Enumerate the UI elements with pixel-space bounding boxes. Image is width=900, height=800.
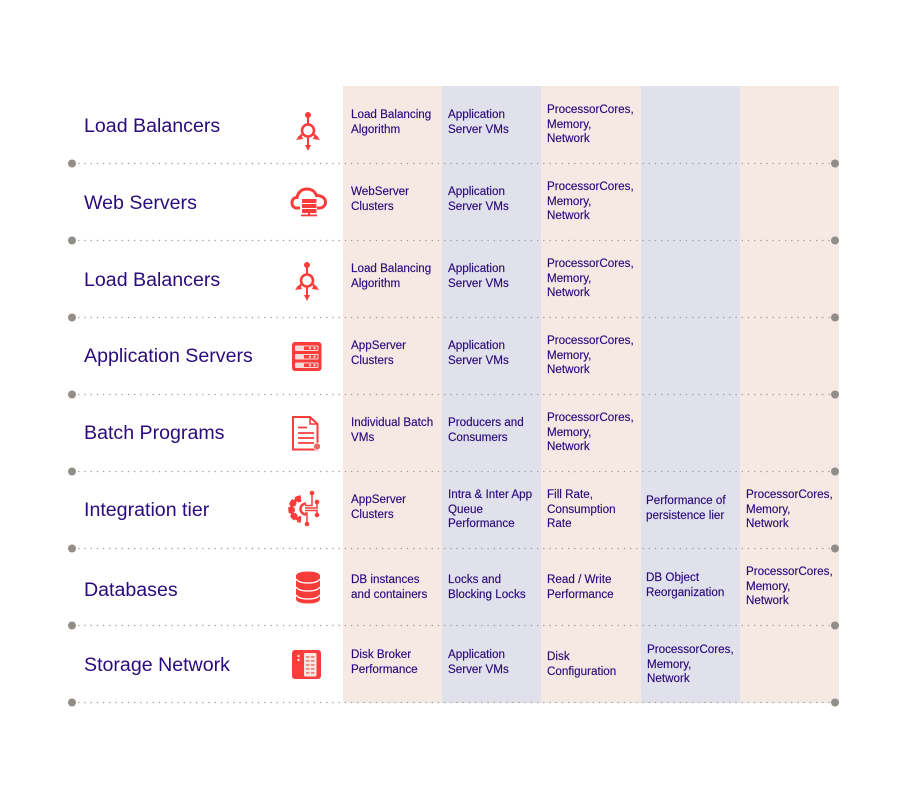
cell texts: row 2 bbox=[351, 180, 634, 222]
icon: server rack bbox=[292, 342, 322, 371]
cell texts: row 2: Server VMs bbox=[448, 200, 509, 213]
cell texts: row 6: ProcessorCores, bbox=[746, 488, 833, 501]
cell texts: row 8: Configuration bbox=[547, 665, 616, 678]
cell texts: row 8 bbox=[351, 643, 734, 685]
cell texts: row 3: Load Balancing bbox=[351, 262, 431, 275]
cell texts: row 6: AppServer bbox=[351, 493, 406, 506]
cell texts: row 1: Application bbox=[448, 108, 505, 121]
cell texts: row 1: Network bbox=[547, 132, 590, 145]
cell texts: row 2: ProcessorCores, bbox=[547, 180, 634, 193]
cell texts: row 6: Rate bbox=[547, 517, 572, 530]
cell texts: row 4: Server VMs bbox=[448, 354, 509, 367]
cell texts: row 6: Network bbox=[746, 517, 789, 530]
cell texts: row 7: DB Object bbox=[646, 571, 699, 584]
cell texts: row 3: ProcessorCores, bbox=[547, 257, 634, 270]
cell texts: row 3 bbox=[351, 257, 634, 299]
cell texts: row 5: Network bbox=[547, 440, 590, 453]
cell texts: row 3: Application bbox=[448, 262, 505, 275]
cell texts: row 1 bbox=[351, 103, 634, 145]
cell texts: row 2: Clusters bbox=[351, 200, 394, 213]
cell texts: row 2: WebServer bbox=[351, 185, 409, 198]
cell texts: row 5: Memory, bbox=[547, 426, 591, 439]
cell texts: row 8: Disk bbox=[547, 650, 570, 663]
cell texts: row 6: Intra & Inter App bbox=[448, 488, 532, 501]
cell texts: row 1: Server VMs bbox=[448, 123, 509, 136]
cell texts: row 6 bbox=[351, 488, 833, 530]
cell texts: row 4: ProcessorCores, bbox=[547, 334, 634, 347]
cell texts: row 6: Fill Rate, bbox=[547, 488, 593, 501]
cell texts: row 3: Algorithm bbox=[351, 277, 400, 290]
panel: column backgrounds bbox=[343, 86, 839, 703]
row heading: Batch Programs: Batch Programs bbox=[84, 422, 224, 444]
icon: load balancer bbox=[295, 262, 319, 301]
cell texts: row 4: AppServer bbox=[351, 339, 406, 352]
row heading: Integration tier: Integration tier bbox=[84, 499, 209, 521]
cell texts: row 8: Performance bbox=[351, 663, 418, 676]
cell texts: row 8: ProcessorCores, bbox=[647, 643, 734, 656]
cell texts: row 8: Disk Broker bbox=[351, 648, 411, 661]
row heading: Load Balancers: Load Balancers bbox=[84, 269, 220, 291]
icon: load balancer bbox=[296, 112, 320, 151]
cell texts: row 8: Memory, bbox=[647, 658, 691, 671]
cell texts: row 7: Memory, bbox=[746, 580, 790, 593]
cell texts: row 4: Memory, bbox=[547, 349, 591, 362]
row heading: Application Servers: Application Servers bbox=[84, 345, 253, 367]
cell texts: row 3: Memory, bbox=[547, 272, 591, 285]
cell texts: row 6: Performance bbox=[448, 517, 515, 530]
cell texts: row 5: Producers and bbox=[448, 416, 524, 429]
cell texts: row 4: Network bbox=[547, 363, 590, 376]
cell texts: row 7 bbox=[351, 565, 833, 607]
icon: cloud server bbox=[290, 188, 327, 216]
cell texts: row 4: Application bbox=[448, 339, 505, 352]
cell texts: row 3: Network bbox=[547, 286, 590, 299]
cell texts: row 6: Performance of bbox=[646, 494, 726, 507]
cell texts: row 3: Server VMs bbox=[448, 277, 509, 290]
cell texts: row 4 bbox=[351, 334, 634, 376]
cell texts: row 5: ProcessorCores, bbox=[547, 411, 634, 424]
cell texts: row 2: Memory, bbox=[547, 195, 591, 208]
row heading: Databases: Databases bbox=[84, 579, 178, 601]
cell texts: row 1: Memory, bbox=[547, 118, 591, 131]
cell texts: row 5: VMs bbox=[351, 431, 374, 444]
icon: database bbox=[296, 572, 320, 604]
cell texts: row 2: Application bbox=[448, 185, 505, 198]
cell texts: row 1: ProcessorCores, bbox=[547, 103, 634, 116]
cell texts: row 8: Application bbox=[448, 648, 505, 661]
cell texts: row 5: Individual Batch bbox=[351, 416, 433, 429]
row heading: Storage Network: Storage Network bbox=[84, 654, 230, 676]
icon: gear circuit bbox=[288, 490, 320, 526]
cell texts: row 1: Load Balancing bbox=[351, 108, 431, 121]
cell texts: row 7: Blocking Locks bbox=[448, 588, 526, 601]
cell texts: row 6: Clusters bbox=[351, 508, 394, 521]
cell texts: row 7: DB instances bbox=[351, 573, 420, 586]
cell texts: row 8: Network bbox=[647, 672, 690, 685]
icon: document bbox=[292, 416, 320, 450]
row heading: Load Balancers: Load Balancers bbox=[84, 115, 220, 137]
icon: storage unit bbox=[292, 650, 321, 679]
cell texts: row 1: Algorithm bbox=[351, 123, 400, 136]
cell texts: row 7: Read / Write bbox=[547, 573, 611, 586]
cell texts: row 7: ProcessorCores, bbox=[746, 565, 833, 578]
cell texts: row 6: persistence lier bbox=[646, 509, 724, 522]
cell texts: row 2: Network bbox=[547, 209, 590, 222]
cell texts: row 6: Queue bbox=[448, 503, 483, 516]
cell texts: row 7: and containers bbox=[351, 588, 427, 601]
cell texts: row 8: Server VMs bbox=[448, 663, 509, 676]
cell texts: row 6: Consumption bbox=[547, 503, 616, 516]
cell texts: row 7: Network bbox=[746, 594, 789, 607]
row heading: Web Servers: Web Servers bbox=[84, 192, 197, 214]
cell texts: row 5 bbox=[351, 411, 634, 453]
cell texts: row 7: Locks and bbox=[448, 573, 501, 586]
cell texts: row 7: Reorganization bbox=[646, 586, 724, 599]
cell texts: row 5: Consumers bbox=[448, 431, 508, 444]
cell texts: row 4: Clusters bbox=[351, 354, 394, 367]
cell texts: row 6: Memory, bbox=[746, 503, 790, 516]
cell texts: row 7: Performance bbox=[547, 588, 614, 601]
